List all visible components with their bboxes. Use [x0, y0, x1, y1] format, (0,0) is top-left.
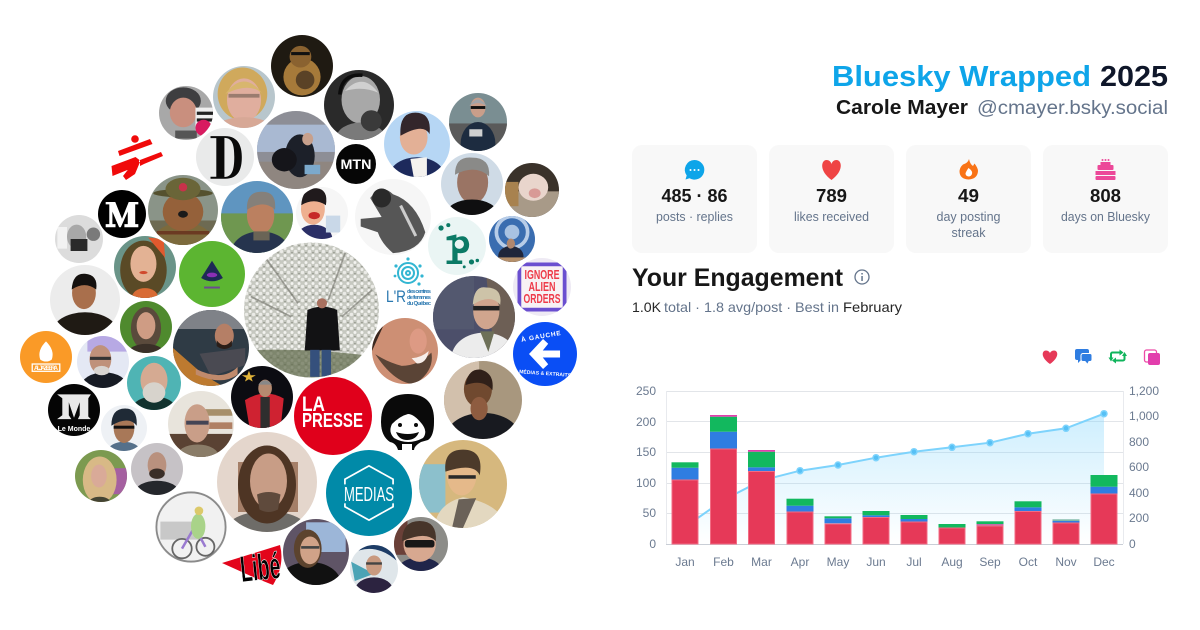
avatar: blonde woman with curls [75, 450, 127, 507]
avatar: piglet [505, 163, 559, 218]
avatar: ignore alien orders sign [513, 258, 571, 316]
avatar: p logo [428, 217, 486, 275]
panel: posting streak stat: day posting [936, 210, 1001, 224]
logo: L'R des centres de femmes du Québec: des centres [407, 289, 431, 295]
month labels: Apr [791, 555, 809, 569]
panel: likes received stat: likes received [794, 210, 869, 224]
bars: likes [672, 449, 1117, 544]
avatar: bald man with glasses [77, 336, 129, 401]
month labels: Mar [751, 555, 772, 569]
icon: flame [960, 159, 978, 180]
month labels: Sep [979, 555, 1001, 569]
month labels: Jan [675, 555, 695, 569]
month labels: May [827, 555, 849, 569]
icon: info [855, 270, 869, 284]
left axis labels: 50 [643, 506, 656, 520]
avatar: man in white coat [433, 276, 515, 358]
panel: days on Bluesky stat: days on Bluesky [1061, 210, 1151, 224]
line: cumulative engagement [685, 414, 1104, 527]
month labels: Dec [1093, 555, 1115, 569]
right axis labels: 1,200 [1129, 384, 1159, 398]
panel: posts and replies stat: posts · replies [656, 210, 733, 224]
avatar: bald man with bookcase [168, 391, 234, 470]
avatar cluster [20, 35, 577, 605]
left axis labels: 200 [636, 415, 656, 429]
left axis labels: 0 [649, 537, 656, 551]
icon: MSF logo [112, 135, 163, 180]
grid lines [666, 391, 1124, 544]
title: 2025 [1100, 61, 1168, 93]
icon: arrowheads of reposts [1108, 350, 1127, 364]
avatar: A gauche badge: MÉDIAS & EXTRAITS [519, 367, 572, 379]
avatar: woman with dog by lake [257, 111, 335, 189]
avatar: woman with heart [159, 86, 213, 140]
left axis labels: 100 [636, 476, 656, 490]
avatar: Le Monde logo [48, 384, 100, 436]
right axis labels: 600 [1129, 460, 1149, 474]
panel: posting streak stat: 49 [958, 186, 979, 206]
avatar: man with sunglasses [394, 517, 448, 571]
panel: posts and replies stat: 485 · 86 [662, 186, 728, 206]
engagement summary: total · 1.8 avg/post · Best in [664, 299, 839, 315]
avatar: ignore alien orders sign: ALIEN [528, 280, 556, 294]
avatar: La Presse logo [294, 377, 372, 455]
avatar: woman before stained glass [283, 519, 349, 585]
avatar: ignore alien orders sign: IGNORE [524, 268, 560, 282]
avatar: A gauche badge: À GAUCHE [520, 328, 562, 344]
avatar: bald bearded man on grey [131, 443, 183, 504]
logo text: MTN: MTN [340, 157, 372, 172]
left axis labels: 250 [636, 384, 656, 398]
panel: days on Bluesky stat [1043, 145, 1168, 253]
month labels: Feb [713, 555, 734, 569]
icon: quotes [1144, 350, 1160, 365]
panel: posting streak stat [906, 145, 1031, 253]
logo: L'R des centres de femmes du Québec [386, 257, 432, 307]
left axis labels: 150 [636, 445, 656, 459]
avatar: radio host black and white [324, 70, 394, 140]
avatar: black and white photographer [55, 215, 103, 263]
avatar: grey-haired man [441, 153, 503, 215]
heading: Your Engagement: Your Engagement [632, 264, 844, 292]
avatar: bearded man on sofa [173, 310, 249, 386]
avatar: cartoon man with mug [296, 187, 348, 239]
bars: replies [672, 432, 1118, 526]
avatar: beaver soldier [148, 175, 218, 245]
logo: Libé: Libé [238, 545, 282, 590]
panel: posts and replies stat [632, 145, 757, 253]
line points [797, 411, 1107, 474]
left axis labels [636, 384, 656, 551]
avatar: Al Jazeera logo [20, 331, 72, 383]
icon: chat bubble [685, 160, 704, 180]
bars: reposts [672, 417, 1118, 528]
area: cumulative engagement [685, 414, 1104, 544]
avatar: M logo black [98, 190, 146, 238]
month labels [675, 555, 1115, 569]
avatar: man in green field [221, 181, 293, 253]
avatar: silver coin with little prince [155, 491, 227, 563]
month labels: Nov [1055, 555, 1077, 569]
avatar: protest woman with sunglasses [449, 93, 507, 151]
right axis labels: 0 [1129, 537, 1136, 551]
user name and handle: Carole Mayer [836, 97, 968, 119]
engagement summary: 1.0K [632, 299, 662, 315]
avatar: La Presse logo: LA [302, 393, 325, 416]
panel: likes received stat: 789 [816, 186, 847, 206]
avatar: Medias logo [326, 450, 412, 536]
logo: L'R des centres de femmes du Québec: L'R [386, 288, 406, 306]
avatar: Al Jazeera logo: ALJAZEERA [34, 366, 59, 372]
avatar: woman with long hair, orange [114, 236, 176, 298]
right axis labels: 400 [1129, 486, 1149, 500]
panel: likes received stat [769, 145, 894, 253]
icon: likes [1043, 350, 1057, 364]
avatar: white-bearded man on teal [127, 356, 181, 421]
user name and handle: @cmayer.bsky.social [977, 98, 1168, 119]
icon: replies [1075, 349, 1092, 364]
avatar: thinking man in glasses [444, 361, 522, 439]
avatar: illustrated man with glasses [101, 405, 147, 460]
avatar: engraving of writer [355, 179, 431, 255]
engagement summary [632, 299, 902, 315]
bars: quotes [710, 415, 775, 452]
chart: monthly engagement [636, 384, 1159, 569]
avatar: blonde woman with glasses [213, 66, 275, 128]
right axis labels: 800 [1129, 435, 1149, 449]
avatar: UN speaker [489, 216, 535, 267]
icon: birthday cake [1096, 159, 1116, 180]
avatar: cartoon girl [381, 394, 434, 450]
avatar: laughing man [372, 318, 438, 384]
icon: heart [822, 160, 841, 180]
chart legend [1043, 349, 1160, 365]
title: Bluesky Wrapped [832, 61, 1091, 93]
month labels: Jun [866, 555, 886, 569]
logo: L'R des centres de femmes du Québec: du Québec [407, 301, 432, 307]
month labels: Jul [906, 555, 922, 569]
avatar: man in purple shirt [350, 545, 398, 593]
avatar: anime doctor [419, 440, 507, 528]
right axis labels [1129, 384, 1159, 551]
month labels: Aug [941, 555, 963, 569]
avatar: La Presse logo: PRESSE [302, 410, 363, 432]
avatar: man in black shirt [50, 265, 120, 335]
avatar: man in red jacket on stage [231, 366, 293, 428]
avatar: Le Monde logo: Le Monde [58, 426, 90, 433]
user name and handle [836, 97, 1168, 119]
logo: L'R des centres de femmes du Québec: de femmes [407, 295, 431, 301]
icon: reposts [1111, 352, 1124, 360]
avatar: ignore alien orders sign: ORDERS [524, 292, 560, 306]
avatar: woman in garden [120, 301, 172, 353]
logo: Libé [222, 545, 282, 590]
avatar: young man in suit [384, 111, 450, 177]
avatar: D logo [196, 128, 254, 186]
panel: days on Bluesky stat: 808 [1090, 186, 1121, 206]
avatar: main photo, woman under blossoms [244, 242, 379, 378]
right axis labels: 1,000 [1129, 409, 1159, 423]
avatar: A gauche badge [513, 322, 577, 386]
avatar: MTN logo [336, 144, 376, 184]
panel: posting streak stat: streak [952, 226, 986, 240]
avatar: Medias logo: MEDIAS [344, 484, 394, 506]
right axis labels: 200 [1129, 511, 1149, 525]
avatar: man with long hair [217, 432, 317, 532]
month labels: Oct [1019, 555, 1038, 569]
avatar: green logo [179, 241, 245, 307]
engagement summary: February [843, 299, 902, 315]
avatar: dark bear [271, 35, 333, 97]
